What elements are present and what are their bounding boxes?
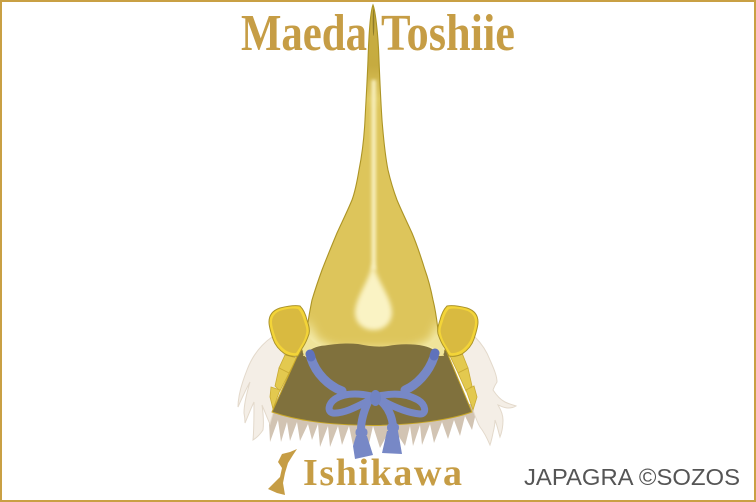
- helmet lower rim: [303, 330, 320, 358]
- right ear plate: [438, 306, 478, 356]
- brim: [272, 350, 472, 426]
- title: Toshiie: [381, 5, 515, 62]
- fur shadow under brim: [268, 404, 478, 448]
- left side plates: [270, 355, 297, 409]
- cord knot: [370, 390, 381, 406]
- helmet illustration: [238, 0, 516, 459]
- icon: Ishikawa prefecture: [268, 449, 297, 495]
- left fur: [238, 337, 285, 440]
- right tassel: [382, 423, 402, 454]
- title: Maeda: [241, 5, 367, 62]
- left ear plate: [269, 306, 309, 356]
- blue cord and knot: [310, 353, 435, 430]
- left tassel: [353, 428, 373, 459]
- right side plates: [450, 353, 477, 410]
- credit: JAPAGRA ©SOZOS: [524, 464, 740, 490]
- prefecture name: Ishikawa: [303, 452, 462, 494]
- right fur: [460, 337, 516, 445]
- cap opening: [306, 344, 439, 372]
- helmet tall crest: [300, 0, 448, 356]
